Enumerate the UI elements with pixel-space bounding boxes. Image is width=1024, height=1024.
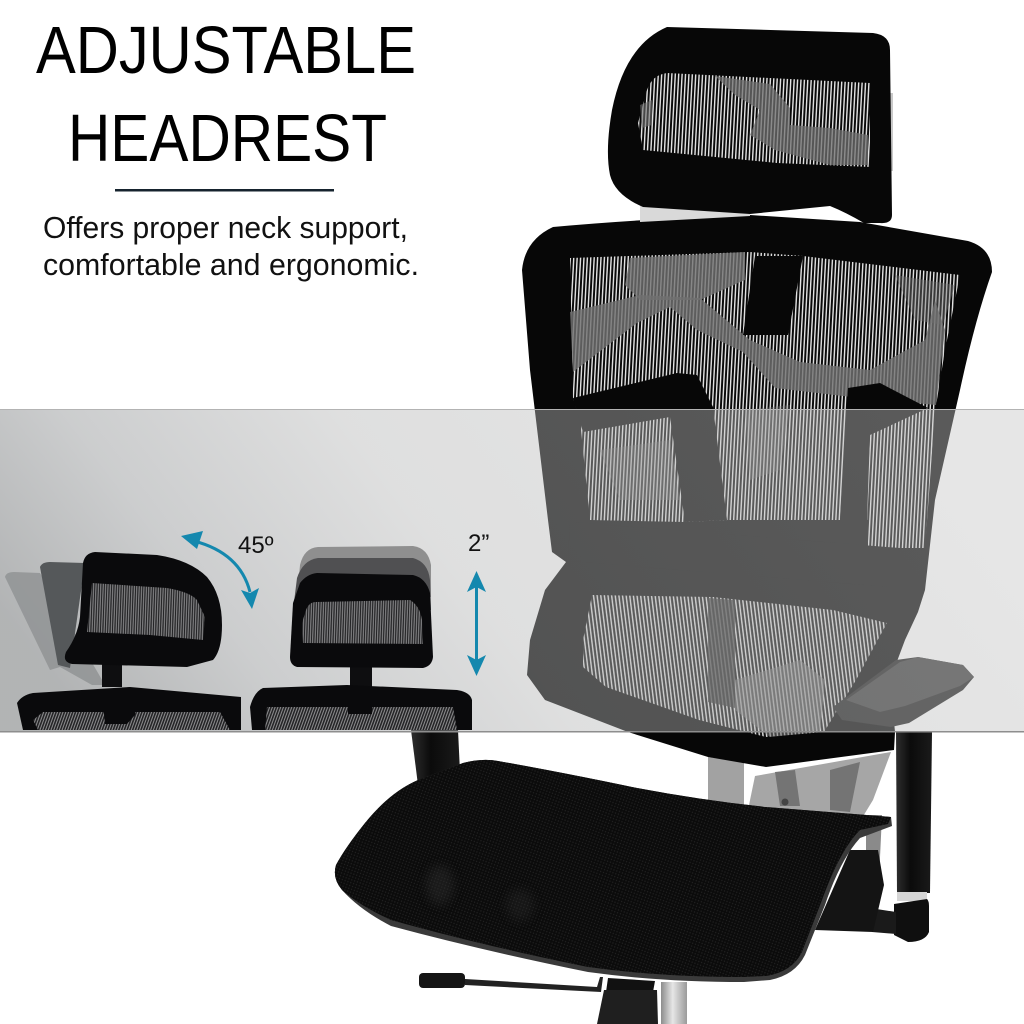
description: Offers proper neck support,: [43, 210, 408, 245]
height lower backrest: [250, 685, 472, 730]
title: [36, 13, 416, 176]
height arrow: [467, 571, 486, 676]
band bottom rule: [0, 731, 1024, 732]
tilt ghost far: [5, 572, 105, 685]
lumbar supports: [573, 373, 928, 548]
height lower mesh: [265, 707, 457, 730]
seat: [335, 760, 892, 982]
backrest body: [522, 215, 992, 767]
height ghost top: [297, 546, 431, 597]
backrest centre tab: [743, 256, 803, 335]
left arm post: [411, 730, 460, 785]
height headrest mesh: [302, 600, 423, 644]
divider: [115, 189, 334, 192]
height tab: [348, 698, 372, 714]
translucent feature band: [0, 409, 1024, 732]
tilt tab: [103, 704, 135, 724]
tilt headrest: [65, 552, 222, 667]
tilt neck: [102, 660, 122, 687]
tilt demonstration chair: [5, 552, 241, 730]
chair mechanism behind seat: [708, 752, 891, 900]
tilt ghost near: [40, 562, 85, 668]
large office chair: [335, 27, 992, 1024]
height neck: [350, 662, 372, 688]
tilt lower mesh: [33, 712, 230, 730]
backrest edge: [568, 522, 925, 590]
upper backrest mesh: [570, 252, 960, 548]
tilt headrest mesh: [87, 583, 205, 640]
headrest mesh: [638, 73, 870, 167]
gas lift column: [597, 978, 687, 1024]
height headrest: [290, 573, 433, 668]
arm pad: [833, 657, 974, 727]
right arm post: [870, 732, 932, 942]
seat underside: [815, 850, 884, 932]
tilt angle label: 45º: [238, 532, 274, 559]
height demonstration chair: [250, 546, 472, 730]
title: ADJUSTABLE: [36, 13, 416, 88]
gas lift lever: [419, 973, 603, 992]
title: HEADREST: [68, 101, 387, 176]
band top rule: [0, 409, 1024, 410]
headrest support glimpses: [640, 93, 893, 222]
tilt arrow: [181, 531, 259, 609]
height label: 2”: [468, 530, 489, 557]
lower back mesh: [583, 595, 887, 737]
description: [43, 210, 419, 282]
headrest: [608, 27, 892, 223]
height ghost middle: [293, 558, 431, 610]
tilt lower backrest: [17, 687, 241, 730]
description: comfortable and ergonomic.: [43, 247, 419, 282]
